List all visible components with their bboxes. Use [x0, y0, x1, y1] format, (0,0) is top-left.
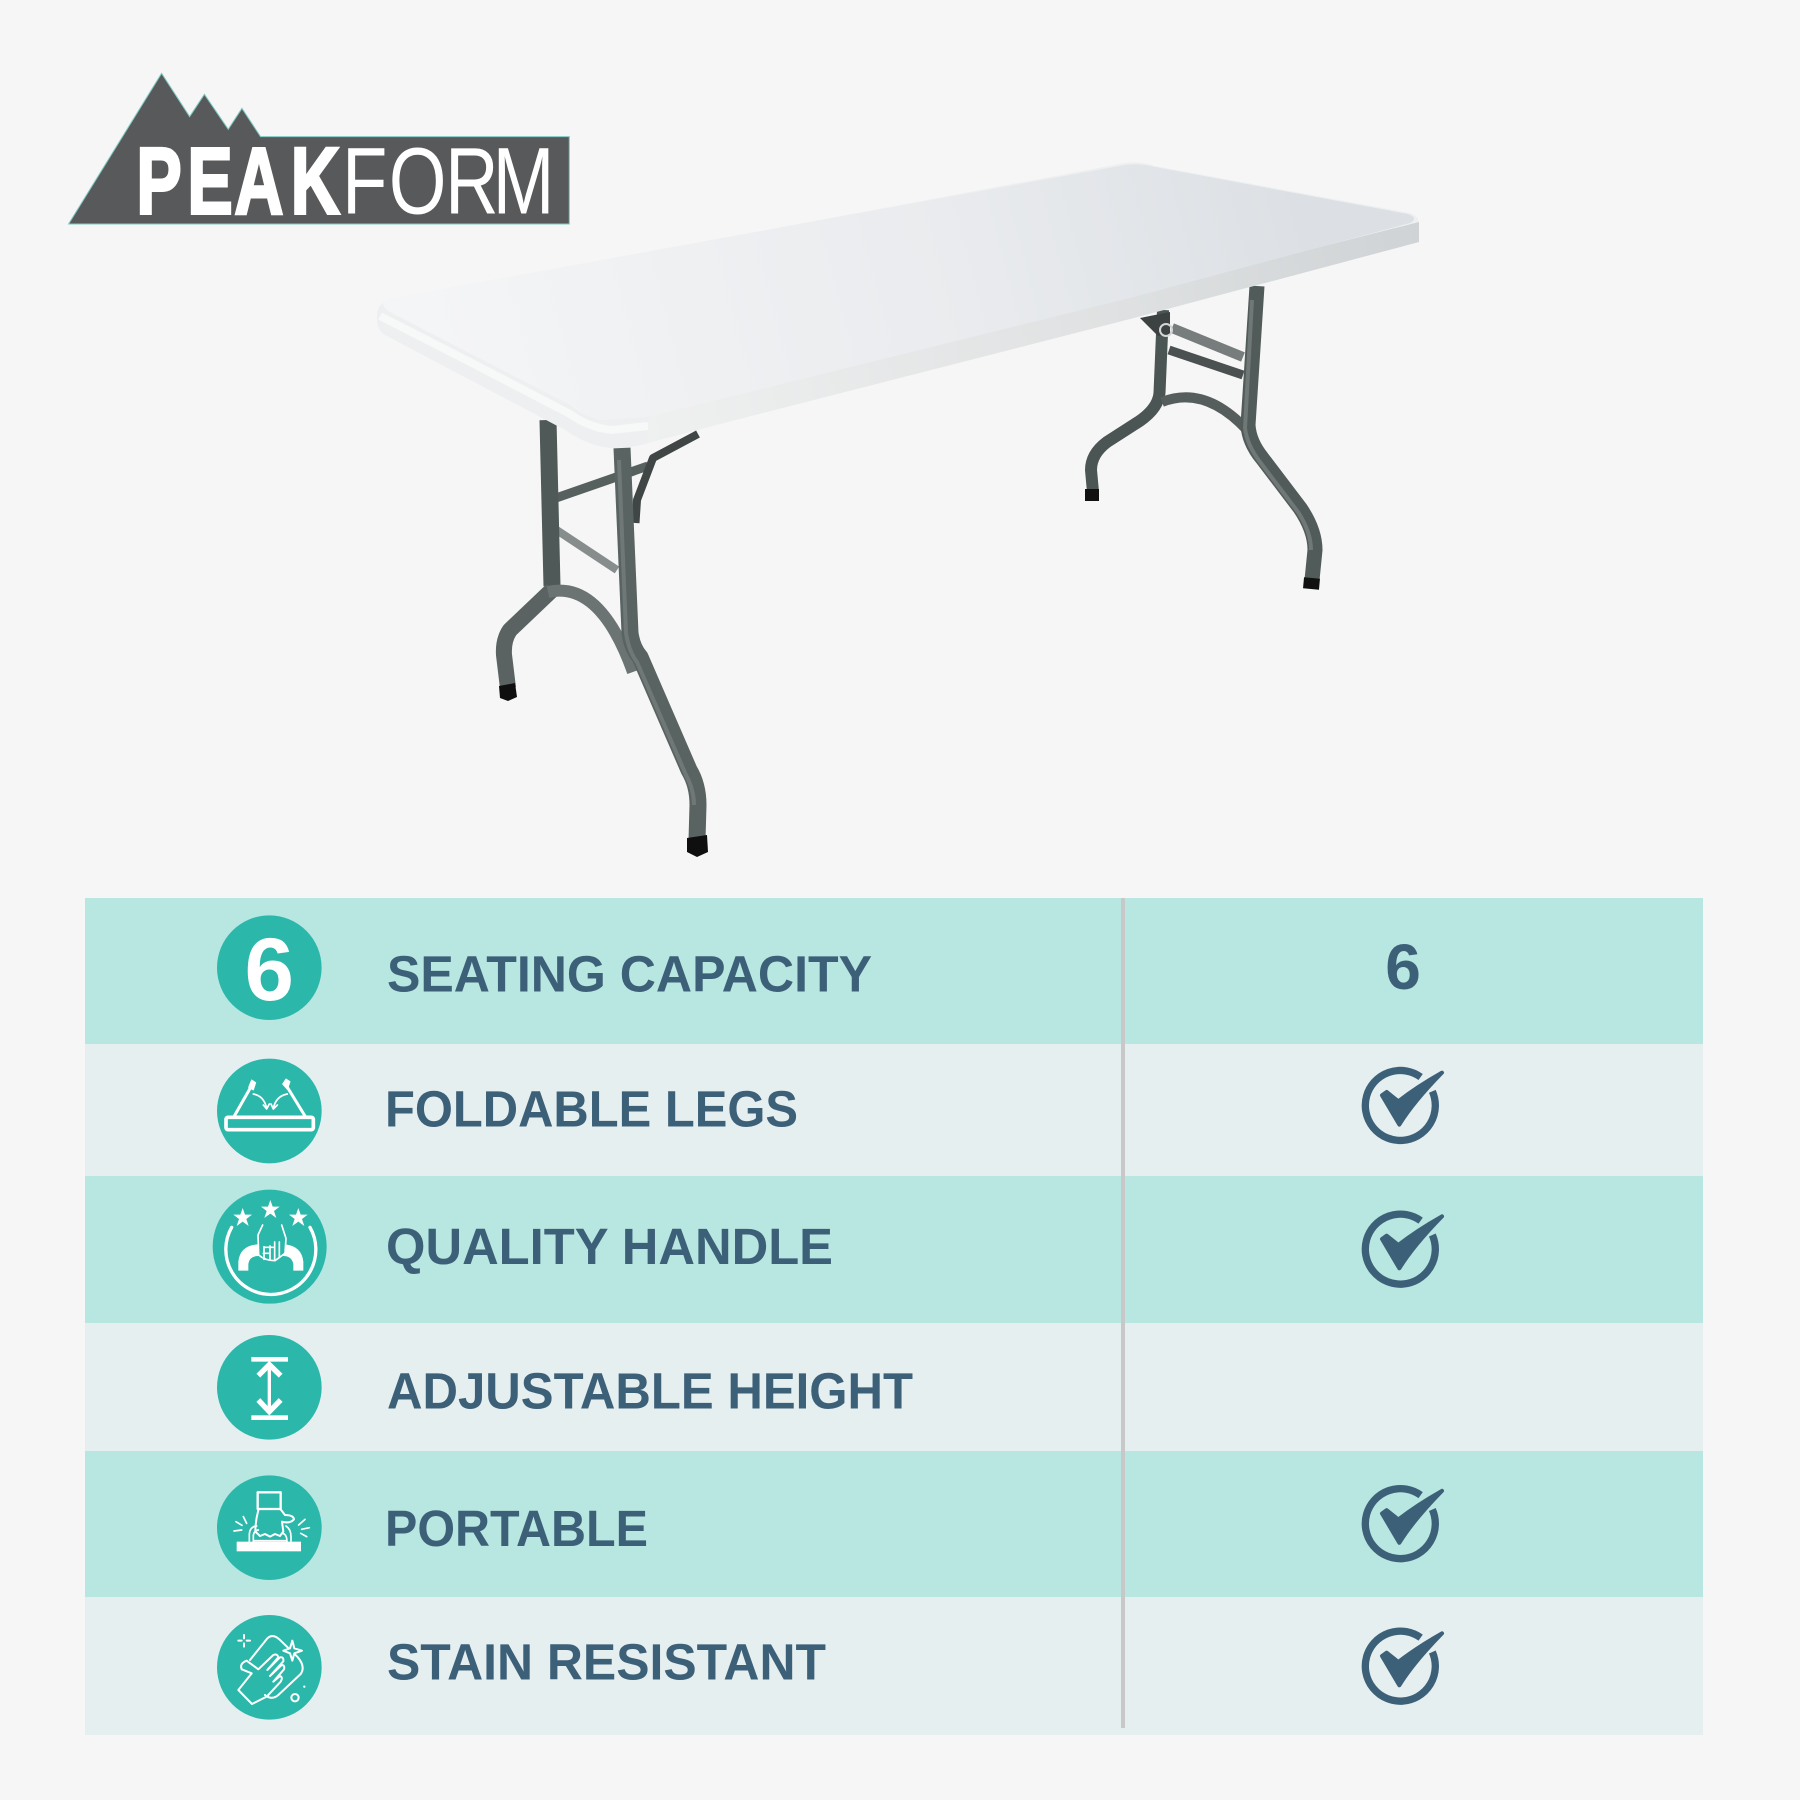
icon: portable — [217, 1475, 322, 1580]
icon: stain resistant — [217, 1615, 322, 1720]
table front edge — [648, 222, 1419, 443]
feature label: foldable legs: FOLDABLE LEGS — [385, 1080, 798, 1138]
far leg assembly — [1091, 286, 1315, 589]
check: portable — [1365, 1489, 1442, 1559]
comparison table — [85, 898, 1703, 1735]
icon: quality handle — [213, 1190, 327, 1304]
check: quality handle — [1365, 1214, 1442, 1284]
feature label: seating capacity: SEATING CAPACITY — [387, 946, 872, 1002]
value: seating capacity 6: 6 — [1385, 931, 1421, 1003]
column divider — [1121, 898, 1125, 1728]
feature label: quality handle: QUALITY HANDLE — [386, 1218, 833, 1275]
feature label: adjustable height: ADJUSTABLE HEIGHT — [387, 1362, 913, 1420]
row band: portable — [85, 1451, 1703, 1597]
table top surface — [383, 164, 1414, 420]
product photo: folding table — [377, 162, 1419, 857]
table rim highlight — [380, 316, 648, 430]
check: foldable legs — [1365, 1070, 1442, 1140]
logo wordmark: FORM — [342, 129, 554, 235]
folding brace — [636, 434, 698, 523]
row band: foldable legs — [85, 1044, 1703, 1176]
row band: quality handle — [85, 1176, 1703, 1323]
near rear leg and arch — [499, 420, 648, 701]
row band: adjustable height — [85, 1323, 1703, 1451]
check: stain resistant — [1365, 1631, 1442, 1701]
feature label: portable: PORTABLE — [385, 1500, 648, 1557]
icon: number 6 — [217, 915, 322, 1020]
logo: PeakForm — [69, 73, 569, 235]
feature label: stain resistant: STAIN RESISTANT — [387, 1634, 826, 1690]
row band: stain resistant — [85, 1597, 1703, 1735]
row band: seating capacity — [85, 898, 1703, 1044]
logo wordmark: PEAK — [136, 127, 340, 234]
near front leg — [619, 448, 708, 857]
icon: number 6: 6 — [245, 919, 294, 1019]
icon: foldable legs — [217, 1059, 322, 1163]
table top underside and edge — [377, 162, 1419, 448]
logo wordmark — [136, 127, 554, 235]
icon: adjustable height — [217, 1335, 322, 1440]
logo mountain banner — [69, 73, 569, 224]
